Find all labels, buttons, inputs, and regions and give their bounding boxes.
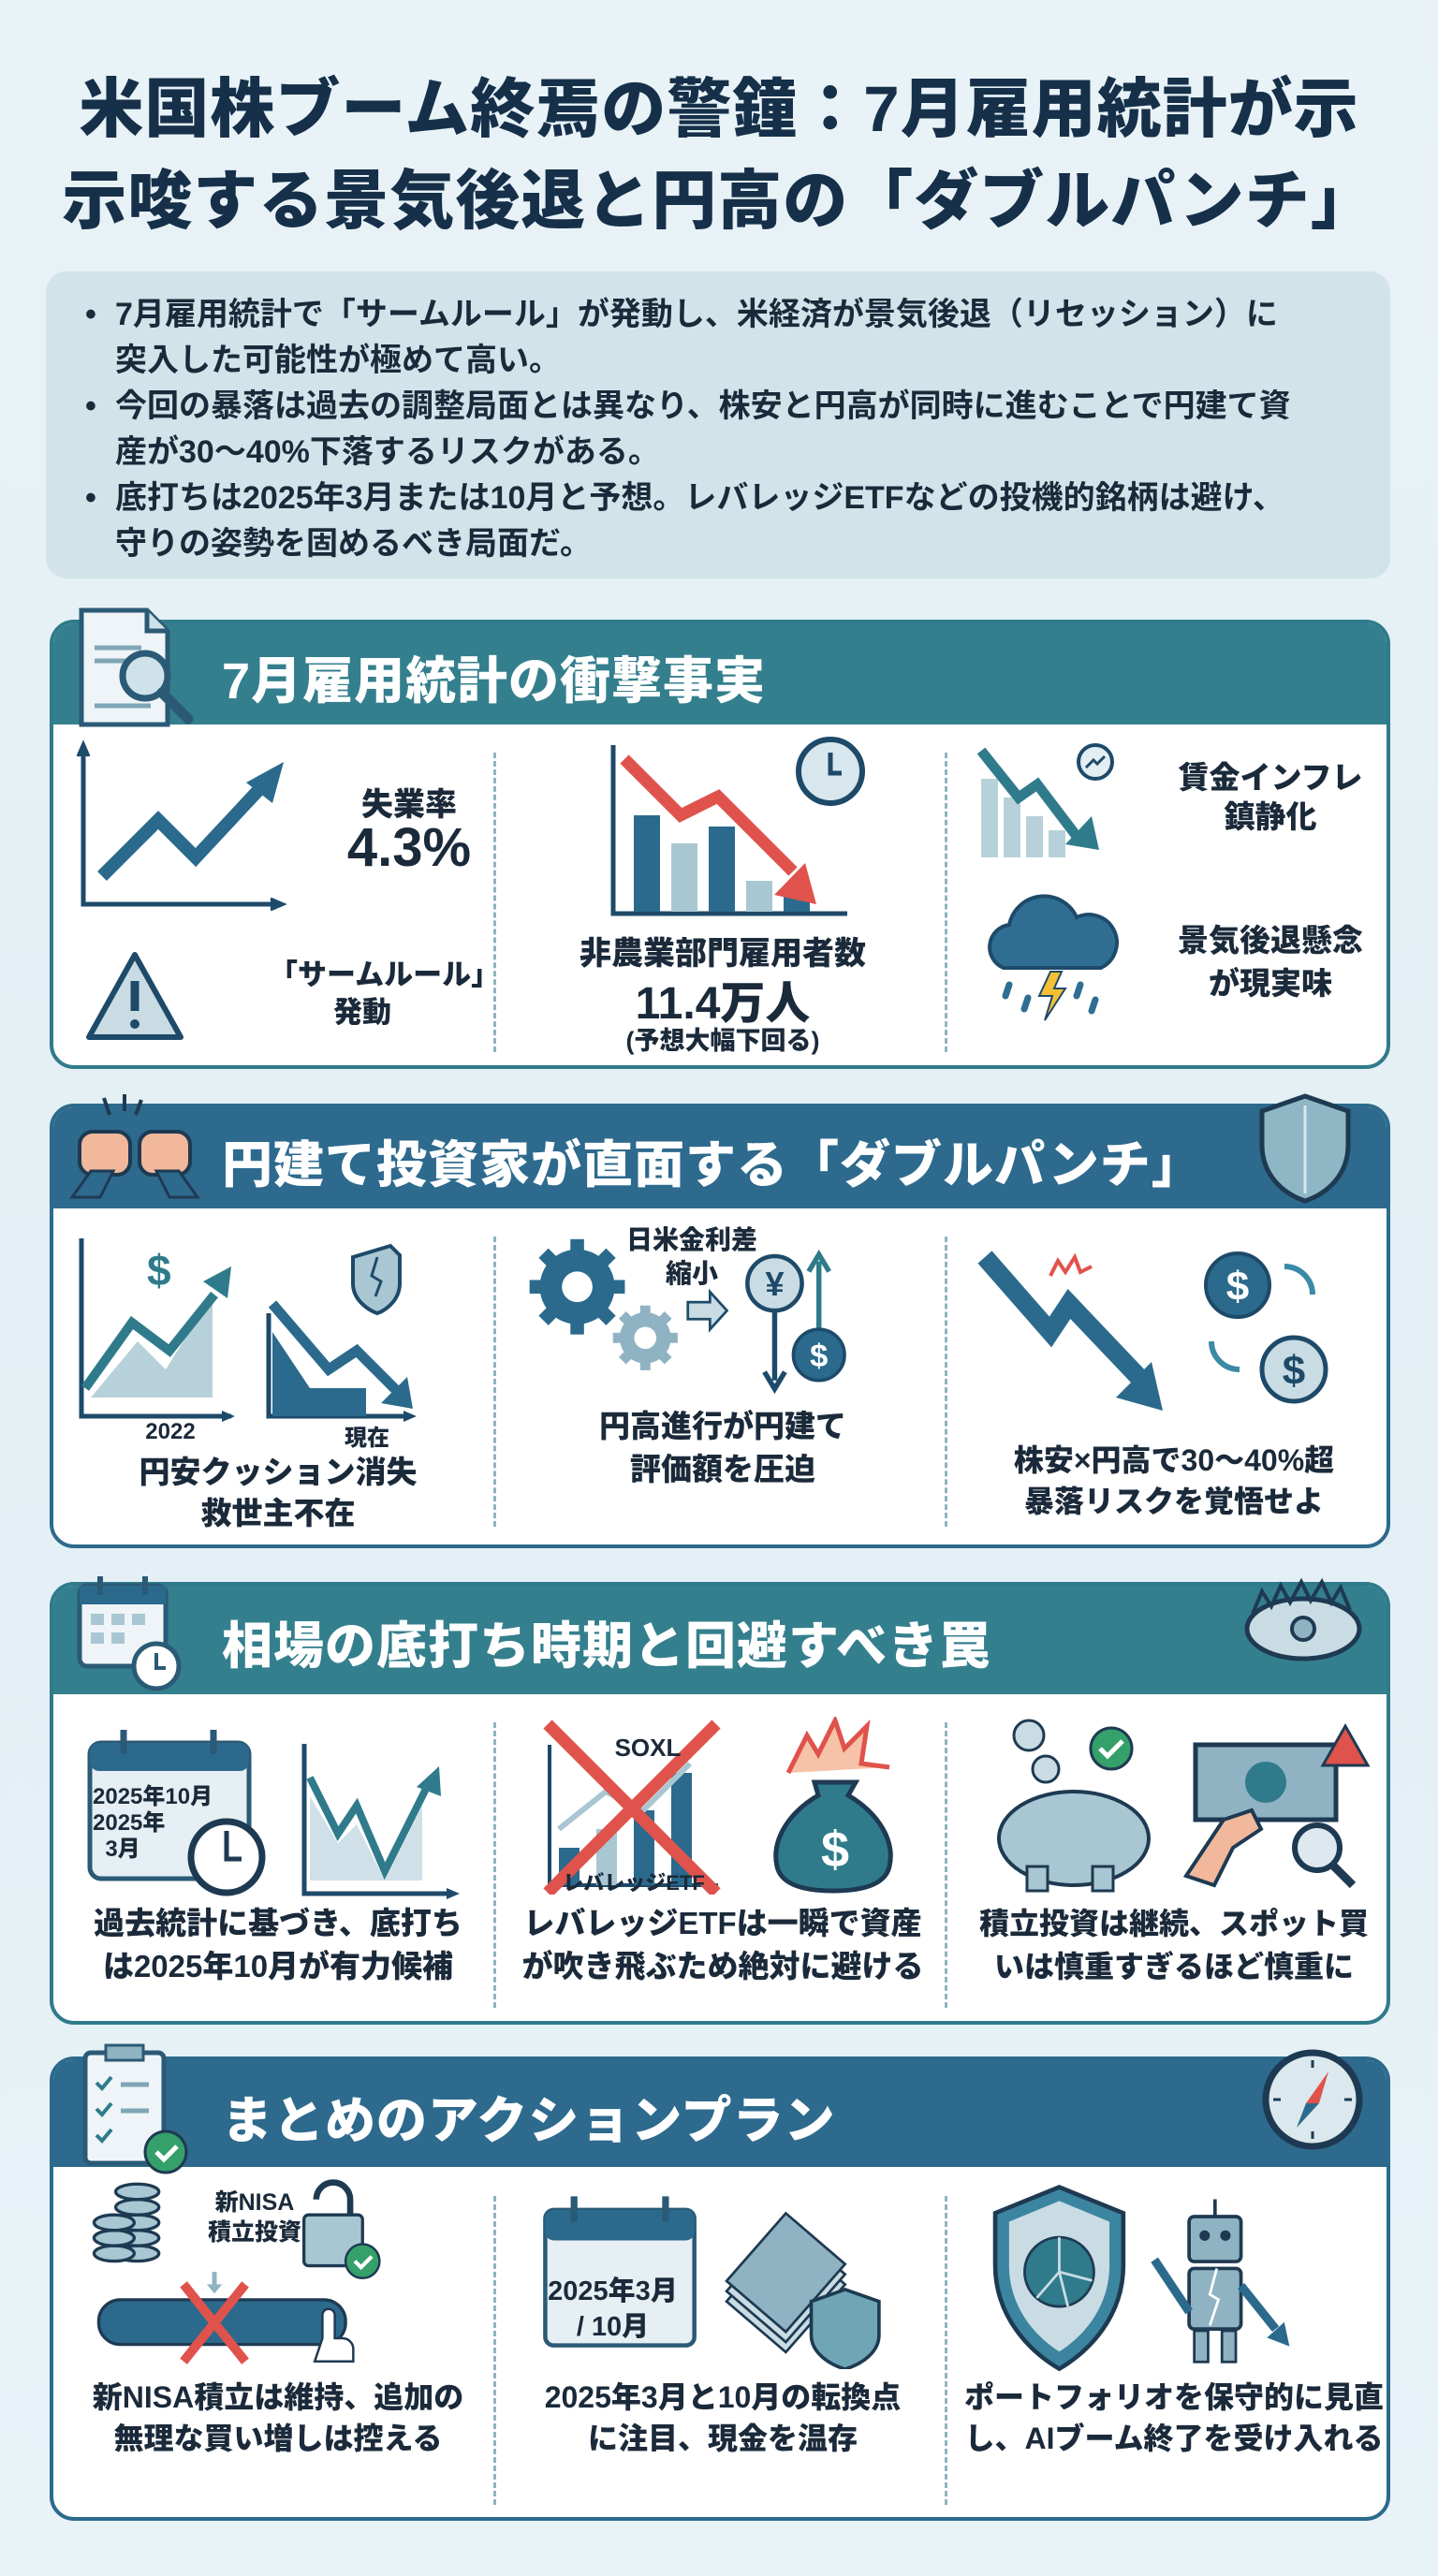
panel: employment shock: 4.3%: [347, 817, 471, 878]
text: bottom forecast: は2025年10月が有力候補: [103, 1949, 453, 1983]
icon: crossed SOXL chart: [543, 1720, 721, 1895]
text: crash risk: [1014, 1443, 1334, 1518]
text: year labels: 2022: [145, 1419, 196, 1444]
header: action plan: [53, 2060, 1387, 2167]
icon: warning: [86, 952, 183, 1040]
panel: market bottom and traps: レバレッジETF: [563, 1871, 705, 1895]
icon: crash arrow and currency swap: $: [1283, 1348, 1305, 1394]
text: installment investing: [979, 1907, 1369, 1983]
text: avoid leverage ETF: [522, 1906, 923, 1983]
icon: exploding money bag: $: [821, 1822, 849, 1878]
icon: gears, yen, dollar: [530, 1239, 846, 1395]
text: cushion lost: 円安クッション消失: [139, 1455, 418, 1489]
icon: V chart: [301, 1744, 460, 1899]
text: calendar dates: 2025年3月: [548, 2276, 678, 2306]
header: double punch: [53, 1107, 1387, 1208]
icon: checklist: [82, 2044, 187, 2174]
panel: employment shock: [50, 620, 1390, 1069]
summary box: [46, 271, 1390, 578]
icon: shield: [1260, 1093, 1350, 1204]
text: portfolio review: ポートフォリオを保守的に見直: [964, 2380, 1384, 2414]
icon: calendar clock: [77, 1576, 182, 1690]
header: bottom timing: 相場の底打ち時期と回避すべき罠: [222, 1618, 990, 1675]
icon: wage chart: [977, 743, 1114, 857]
text: turning points: に注目、現金を温存: [588, 2422, 858, 2455]
text: yen appreciation: [599, 1409, 846, 1486]
header: bottom timing: [53, 1586, 1387, 1694]
icon: coins lock bar: [92, 2179, 381, 2364]
icon: compass: [1262, 2050, 1363, 2149]
text: recession: が現実味: [1209, 966, 1332, 1001]
icon: bar chart falling: [610, 745, 847, 915]
summary box: 産が30〜40%下落するリスクがある。: [115, 434, 660, 470]
text: yen appreciation: 評価額を圧迫: [630, 1452, 815, 1486]
summary box: 7月雇用統計で「サームルール」が発動し、米経済が景気後退（リセッション）に: [115, 297, 1278, 332]
text: rate gap narrowing: [626, 1225, 757, 1288]
panel: employment shock: 11.4万人: [636, 979, 810, 1029]
icon: calendar with dates: [88, 1730, 266, 1896]
text: sahm rule: 発動: [333, 996, 391, 1029]
summary box: 突入した可能性が極めて高い。: [115, 343, 561, 378]
text: yen appreciation: 円高進行が円建て: [599, 1409, 846, 1443]
text: calendar dates: / 10月: [577, 2312, 649, 2342]
text: recession: [1178, 923, 1363, 1001]
icon: 2022 up chart and now down chart: [79, 1238, 417, 1422]
title: [62, 73, 1376, 237]
icon: fists: [69, 1094, 200, 1198]
icon: gears, yen, dollar: $: [810, 1339, 828, 1374]
icon: rising chart: [77, 739, 287, 912]
icon: calendar and cash: [543, 2196, 881, 2369]
text: sahm rule: [269, 959, 500, 1029]
text: keep NISA: 新NISA積立は維持、追加の: [93, 2380, 463, 2414]
text: unemployment: 失業率: [361, 787, 457, 823]
text: nonfarm payrolls: 非農業部門雇用者数: [580, 936, 866, 972]
text: turning points: [545, 2380, 901, 2455]
text: calendar dates: 3月: [105, 1837, 140, 1862]
text: bottom forecast: [94, 1906, 462, 1983]
text: crash risk: 株安×円高で30〜40%超: [1014, 1443, 1334, 1477]
icon: shield pie and robot: [992, 2185, 1290, 2372]
text: calendar dates: [548, 2276, 678, 2342]
text: NISA label: [208, 2189, 301, 2246]
summary box: 今回の暴落は過去の調整局面とは異なり、株安と円高が同時に進むことで円建て資: [115, 388, 1291, 424]
text: NISA label: 新NISA: [215, 2189, 294, 2216]
text: rate gap narrowing: 縮小: [666, 1259, 718, 1288]
text: rate gap narrowing: 日米金利差: [626, 1225, 757, 1254]
text: portfolio review: [954, 2377, 1394, 2459]
text: cushion lost: [139, 1455, 418, 1530]
header: action plan: まとめのアクションプラン: [222, 2093, 836, 2149]
text: keep NISA: [93, 2380, 463, 2455]
icon: clock: [796, 737, 865, 806]
text: calendar dates: 2025年: [93, 1810, 165, 1836]
icon: bear trap: [1245, 1578, 1361, 1661]
header: employment: 7月雇用統計の衝撃事実: [222, 653, 766, 710]
text: installment investing: いは慎重すぎるほど慎重に: [994, 1950, 1354, 1983]
icon: storm cloud: [988, 894, 1120, 1020]
panel: employment shock: (予想大幅下回る): [625, 1027, 819, 1055]
text: crash risk: 暴落リスクを覚悟せよ: [1024, 1485, 1324, 1518]
title: 示唆する景気後退と円高の「ダブルパンチ」: [62, 165, 1376, 237]
text: keep NISA: 無理な買い増しは控える: [113, 2422, 443, 2455]
icon: exploding money bag: [773, 1717, 893, 1893]
text: recession: 景気後退懸念: [1178, 923, 1363, 958]
panel: double punch: 現在: [345, 1426, 389, 1451]
panel: market bottom and traps: [50, 1582, 1390, 2025]
text: wage inflation: [1178, 760, 1363, 834]
text: avoid leverage ETF: レバレッジETFは一瞬で資産: [523, 1906, 922, 1940]
summary box: 底打ちは2025年3月または10月と予想。レバレッジETFなどの投機的銘柄は避け、: [115, 480, 1284, 516]
text: cushion lost: 救世主不在: [200, 1496, 356, 1530]
panel: double punch: [50, 1104, 1390, 1548]
icon: crash arrow and currency swap: [977, 1251, 1328, 1411]
text: wage inflation: 賃金インフレ: [1178, 760, 1363, 795]
text: portfolio review: し、AIブーム終了を受け入れる: [964, 2422, 1384, 2455]
icon: 2022 up chart and now down chart: $: [147, 1246, 171, 1295]
summary box: 守りの姿勢を固めるべき局面だ。: [115, 526, 592, 562]
text: sahm rule: 「サームルール」: [269, 959, 500, 991]
icon: piggy bank and cash: [997, 1719, 1371, 1893]
text: installment investing: 積立投資は継続、スポット買: [979, 1907, 1369, 1940]
text: wage inflation: 鎮静化: [1225, 799, 1316, 834]
text: calendar dates: 2025年10月: [93, 1784, 213, 1809]
text: calendar dates: [93, 1784, 213, 1862]
icon: crash arrow and currency swap: $: [1226, 1264, 1249, 1310]
text: bottom forecast: 過去統計に基づき、底打ち: [94, 1906, 462, 1940]
panel: action plan: [50, 2056, 1390, 2521]
icon: document magnifier: [79, 608, 193, 726]
header: double punch: 円建て投資家が直面する「ダブルパンチ」: [222, 1137, 1203, 1193]
text: avoid leverage ETF: が吹き飛ぶため絶対に避ける: [522, 1949, 923, 1983]
icon: gears, yen, dollar: ¥: [765, 1265, 785, 1303]
text: turning points: 2025年3月と10月の転換点: [545, 2380, 901, 2414]
title: 米国株ブーム終焉の警鐘：7月雇用統計が示: [79, 73, 1359, 145]
text: NISA label: 積立投資: [208, 2219, 301, 2246]
header: employment: [53, 623, 1387, 724]
text: SOXL labels: SOXL: [615, 1734, 681, 1762]
